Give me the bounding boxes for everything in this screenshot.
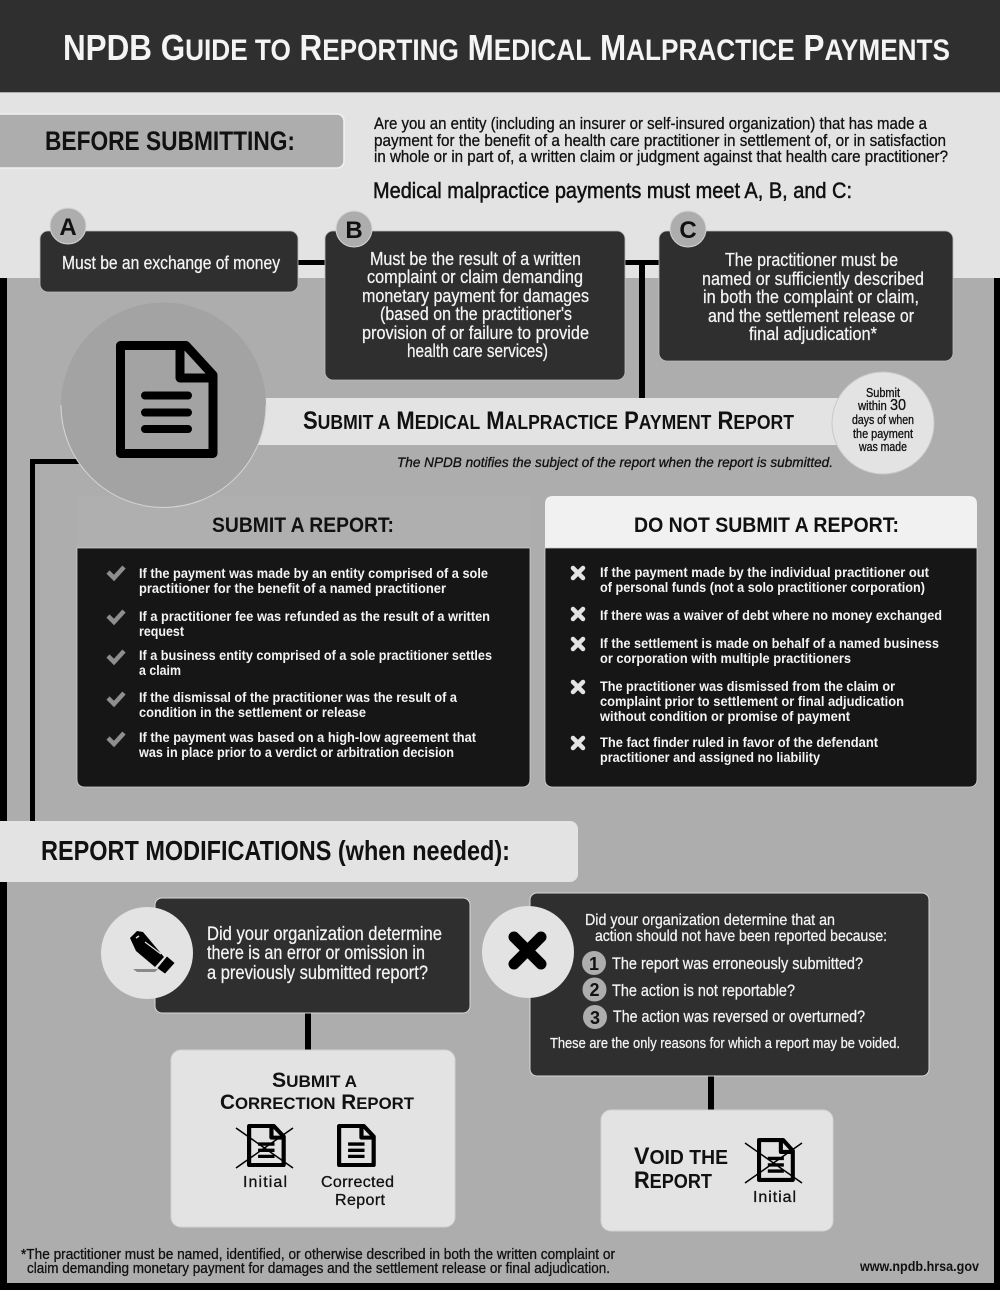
- text C: named or sufficiently described: [702, 269, 924, 289]
- text B: health care services): [407, 341, 548, 361]
- heading: submit a report: SUBMIT A REPORT:: [212, 514, 394, 537]
- check icons: [108, 567, 124, 744]
- text C: The practitioner must be: [725, 250, 898, 270]
- icon: crossed out report: [745, 1140, 802, 1183]
- heading: correction report: SUBMIT A: [272, 1069, 357, 1092]
- icon: pencil: [101, 907, 193, 999]
- icon: corrected report: [339, 1126, 374, 1165]
- text B: monetary payment for damages: [362, 286, 589, 306]
- subheading: criteria: Medical malpractice payments must meet A, B, and C:: [373, 178, 852, 203]
- list: submit criteria: a claim: [139, 662, 181, 678]
- list: do not submit criteria: The fact finder ruled in favor of the defendant: [600, 734, 878, 750]
- label: corrected report: Report: [335, 1192, 386, 1209]
- icon: x in circle: [482, 906, 574, 998]
- list: submit criteria: If the payment was based on a high-low agreement that: [139, 729, 476, 745]
- reason 3: The action was reversed or overturned?: [613, 1008, 865, 1026]
- heading: before submitting: [0, 114, 344, 168]
- badge C: [670, 211, 706, 247]
- submit report band: [250, 398, 850, 445]
- text B: [362, 249, 589, 361]
- connectors between criteria: [296, 260, 661, 399]
- reason 1: The report was erroneously submitted?: [612, 955, 863, 973]
- list: submit criteria: request: [139, 623, 184, 639]
- intro text block: Are you an entity (including an insurer or self-insured organization) that has made a: [374, 114, 927, 133]
- title banner: [0, 0, 1000, 92]
- footnote: [21, 1247, 615, 1277]
- website url: www.npdb.hrsa.gov: [859, 1258, 979, 1274]
- list: do not submit criteria: [599, 564, 942, 765]
- text: correction question: there is an error or omission in: [207, 943, 425, 964]
- text: correction question: [207, 924, 442, 984]
- connectors: modifications: [305, 1013, 714, 1111]
- text: void question: Did your organization determine that an: [585, 912, 835, 929]
- list: submit criteria: was in place prior to a verdict or arbitration decision: [138, 744, 454, 760]
- callout: 30 day deadline: [832, 372, 934, 474]
- list: do not submit criteria: If the payment made by the individual practitioner out: [600, 564, 929, 580]
- text C: in both the complaint or claim,: [703, 287, 919, 307]
- panel: criterion C: [659, 211, 953, 361]
- heading: do not submit: DO NOT SUBMIT A REPORT:: [634, 514, 899, 537]
- reason 3: 3: [590, 1008, 600, 1028]
- text A: Must be an exchange of money: [62, 253, 280, 273]
- list: submit criteria: If a practitioner fee was refunded as the result of a written: [139, 608, 490, 624]
- panel: do not submit a report: [545, 496, 977, 787]
- reason 2: 2: [589, 980, 600, 1000]
- intro text block: payment for the benefit of a health care practitioner in settlement of, or in satisfaction: [374, 131, 946, 150]
- reason 2: The action is not reportable?: [612, 982, 795, 1000]
- icon: crossed out initial report: [236, 1126, 293, 1168]
- reason 1: [582, 951, 863, 975]
- list: do not submit criteria: of personal funds (not a solo practitioner corporation): [600, 579, 925, 595]
- list: do not submit criteria: If the settlement is made on behalf of a named business: [600, 635, 939, 651]
- label: initial: Initial: [753, 1189, 796, 1206]
- heading: report modifications: [0, 821, 578, 882]
- panel: void question: [482, 893, 929, 1076]
- list: submit criteria: If the dismissal of the practitioner was the result of a: [139, 689, 457, 705]
- callout: 30 day deadline: was made: [858, 440, 907, 454]
- heading: void the report: REPORT: [634, 1167, 712, 1194]
- reason 1: 1: [589, 954, 599, 974]
- badge B: B: [345, 217, 363, 244]
- text B: complaint or claim demanding: [367, 267, 583, 287]
- title: NPDB GUIDE TO REPORTING MEDICAL MALPRACTICE PAYMENTS: [63, 27, 950, 68]
- heading: correction report: [220, 1069, 415, 1114]
- heading: before submitting: BEFORE SUBMITTING:: [45, 126, 295, 156]
- list: do not submit criteria: The practitioner was dismissed from the claim or: [600, 678, 895, 694]
- list: submit criteria: If the payment was made by an entity comprised of a sole: [139, 565, 488, 581]
- text: correction question: a previously submitted report?: [207, 963, 428, 984]
- label: corrected report: [321, 1174, 394, 1209]
- panel: void the report: [601, 1110, 833, 1231]
- connector: report to modifications: [30, 459, 80, 822]
- intro text block: [374, 114, 948, 166]
- list: submit criteria: practitioner for the benefit of a named practitioner: [139, 580, 447, 596]
- panel: submit a report: [77, 496, 530, 787]
- heading: void the report: VOID THE: [634, 1143, 728, 1170]
- list: submit criteria: [138, 565, 492, 760]
- callout: 30 day deadline: Submit: [866, 386, 900, 400]
- list: submit criteria: If a business entity comprised of a sole practitioner settles: [139, 647, 492, 663]
- note: subject notification: The NPDB notifies the subject of the report when the report is submitted.: [397, 454, 833, 470]
- text B: Must be the result of a written: [370, 249, 581, 269]
- list: do not submit criteria: or corporation with multiple practitioners: [600, 650, 851, 666]
- badge A: [50, 208, 86, 244]
- icon: document in circle: [61, 302, 266, 508]
- list: do not submit criteria: practitioner and assigned no liability: [600, 749, 820, 765]
- callout: 30 day deadline: the payment: [853, 427, 913, 441]
- submit report band: SUBMIT A MEDICAL MALPRACTICE PAYMENT REPORT: [303, 407, 794, 435]
- callout: 30 day deadline: days of when: [852, 413, 914, 427]
- heading: report modifications: REPORT MODIFICATIONS (when needed):: [41, 835, 510, 866]
- badge C: C: [679, 217, 697, 244]
- panel: correction question: [101, 898, 470, 1013]
- callout: 30 day deadline: within 30: [857, 397, 906, 414]
- text: correction question: Did your organization determine: [207, 924, 442, 945]
- reason 3: [583, 1005, 865, 1029]
- list: do not submit criteria: without condition or promise of payment: [599, 708, 850, 724]
- text B: (based on the practitioner's: [380, 304, 572, 324]
- panel: criterion A: [40, 208, 298, 292]
- text C: final adjudication*: [749, 324, 877, 344]
- label: initial: Initial: [243, 1174, 287, 1191]
- list: do not submit criteria: If there was a waiver of debt where no money exchanged: [600, 607, 942, 623]
- reason 2: [582, 978, 795, 1002]
- footnote: claim demanding monetary payment for damages and the settlement release or final adjudication.: [27, 1261, 610, 1277]
- list: do not submit criteria: complaint prior to settlement or final adjudication: [600, 693, 904, 709]
- text C: [702, 250, 924, 344]
- x icons: [573, 568, 583, 748]
- list: submit criteria: condition in the settlement or release: [139, 704, 366, 720]
- text: void question: action should not have been reported because:: [595, 928, 887, 945]
- heading: void the report: [634, 1143, 728, 1194]
- text B: provision of or failure to provide: [362, 323, 589, 343]
- badge B: [336, 211, 372, 247]
- heading: correction report: CORRECTION REPORT: [220, 1091, 415, 1114]
- text: void question: [585, 912, 887, 945]
- label: corrected report: Corrected: [321, 1174, 394, 1191]
- badge A: A: [59, 214, 77, 241]
- text C: and the settlement release or: [708, 306, 914, 326]
- panel: criterion B: [325, 211, 625, 380]
- note: void reasons: These are the only reasons for which a report may be voided.: [550, 1036, 900, 1052]
- panel: submit a correction report: [171, 1050, 455, 1227]
- footnote: *The practitioner must be named, identified, or otherwise described in both the written complaint or: [21, 1247, 615, 1263]
